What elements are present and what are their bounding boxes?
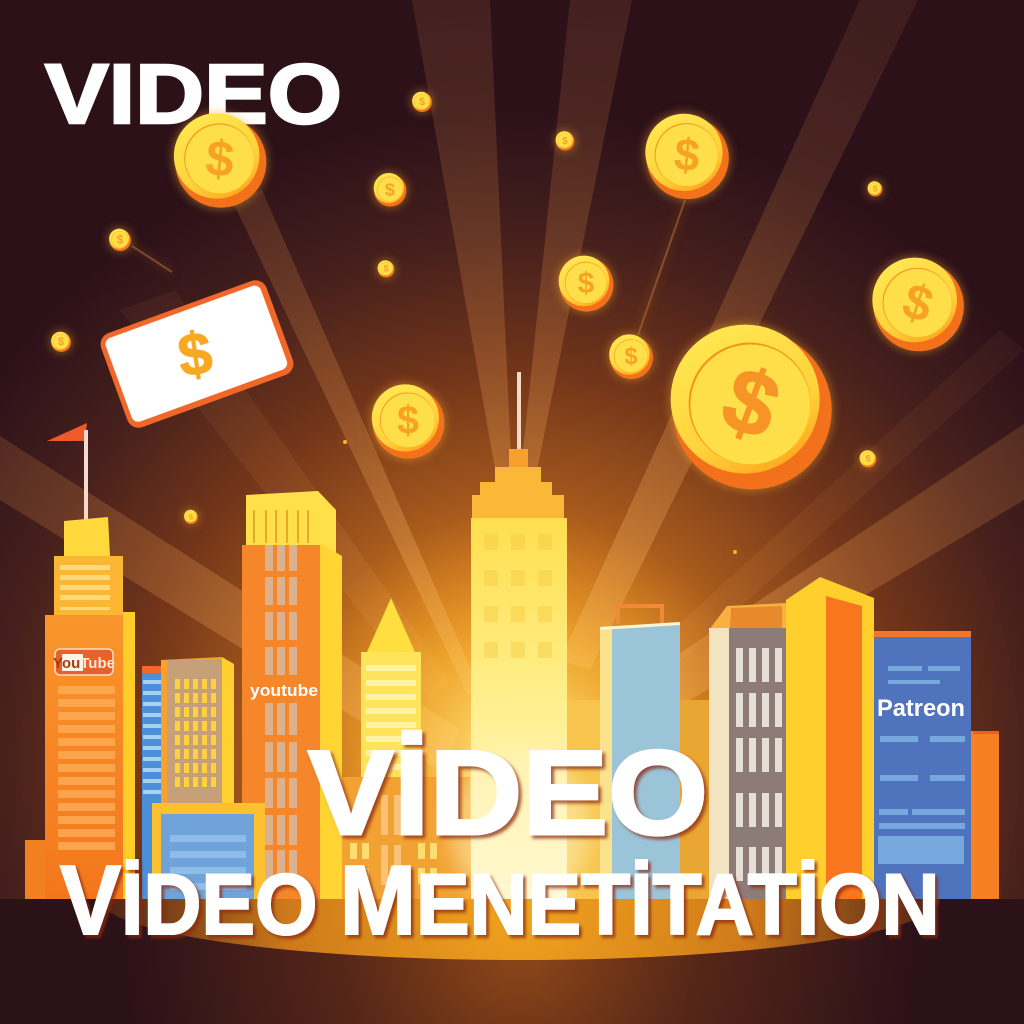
small coins: $ — [383, 264, 389, 274]
coin: mid — [559, 256, 613, 312]
coin: top right: $ — [672, 128, 702, 181]
sparkles — [343, 440, 737, 554]
small coins: $ — [189, 512, 194, 521]
building: far right orange — [970, 731, 999, 900]
building: spire — [361, 598, 421, 782]
coin: large — [671, 325, 832, 489]
small coins: $ — [865, 454, 871, 464]
coin trails — [132, 200, 685, 335]
coin: top right — [645, 114, 729, 199]
building: low orange — [342, 777, 470, 900]
skyline — [25, 372, 999, 900]
small coins: $ — [58, 336, 64, 348]
building: pale blue front — [152, 803, 265, 900]
sign: youtube: youtube — [250, 681, 318, 700]
bottom title: VİDEO MENETİTATİON — [60, 846, 940, 956]
building: side fills — [567, 700, 709, 900]
building: blue striped — [142, 666, 164, 900]
banknote card — [97, 277, 297, 431]
building: tan grid — [161, 657, 234, 805]
small coins — [51, 92, 882, 524]
coin: top left — [174, 113, 266, 208]
coin: centre left: $ — [397, 399, 419, 443]
coin: mid: $ — [578, 267, 595, 300]
small coins: $ — [562, 136, 568, 147]
coin: mid lower: $ — [624, 343, 638, 370]
coin: small upper — [374, 173, 406, 207]
coin: right: $ — [896, 272, 940, 334]
building: light blue — [600, 606, 680, 900]
central glow — [270, 510, 770, 1010]
sign: YouTube: YouTube — [53, 655, 115, 672]
building: yellow orange slab — [786, 577, 874, 900]
coin: right — [872, 258, 964, 351]
small coins: $ — [117, 233, 124, 247]
building: youtube tower — [242, 491, 342, 900]
small coins: $ — [419, 96, 425, 108]
building: grey striped — [709, 603, 787, 900]
light rays — [0, 0, 1024, 770]
coin: large: $ — [710, 347, 792, 459]
ground — [0, 899, 1024, 1024]
building: left youtube tower — [45, 423, 135, 900]
floating coins — [51, 92, 964, 554]
sign: YouTube — [53, 649, 115, 675]
foreground glow over tower base — [450, 750, 590, 910]
small coins: $ — [873, 184, 878, 193]
banknote card: $ — [174, 319, 216, 390]
coin: centre left — [372, 384, 444, 459]
centre title: VİDEO — [308, 726, 708, 860]
coin: top left: $ — [204, 130, 236, 188]
building: central tower — [471, 372, 567, 900]
building: Patreon blue — [874, 631, 971, 900]
top heading: VIDEO — [45, 47, 342, 141]
coin: mid lower — [609, 334, 653, 379]
coin: small upper: $ — [385, 179, 395, 199]
sign: Patreon: Patreon — [877, 695, 965, 722]
building: far left low — [25, 840, 45, 900]
